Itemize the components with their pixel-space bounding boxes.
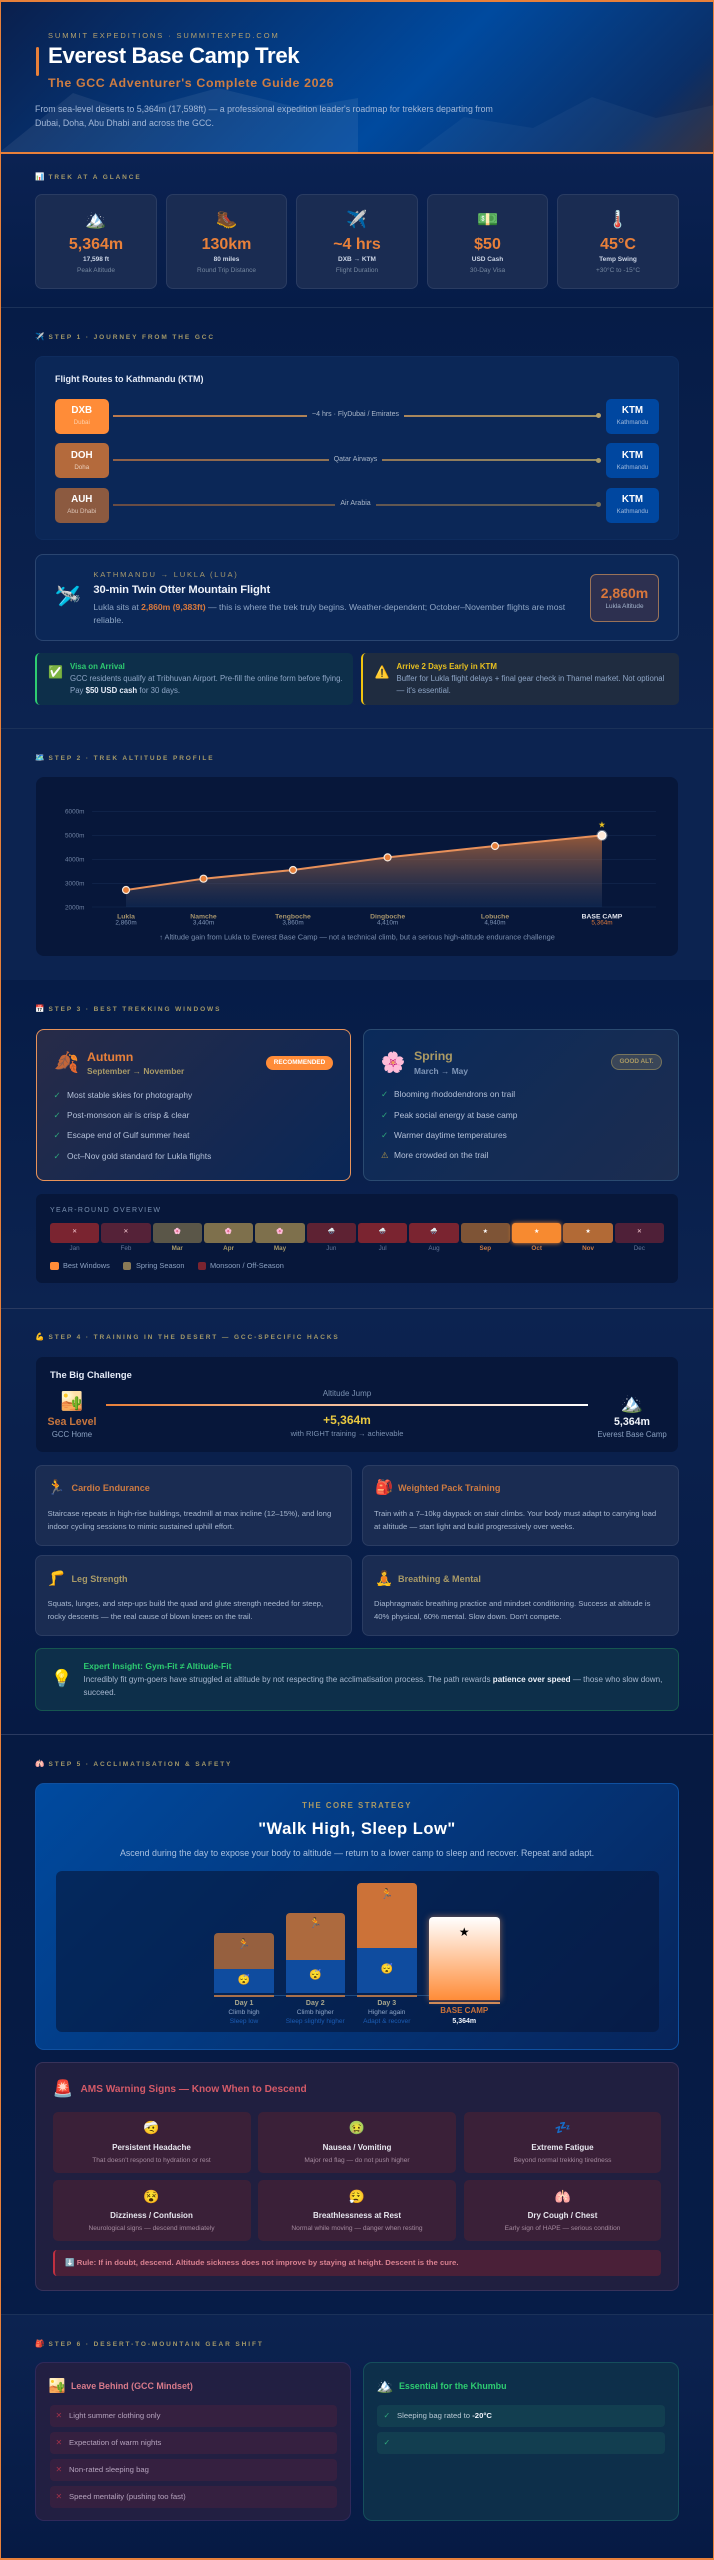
- card: breathing: Diaphragmatic breathing practice and mindset conditioning. Success at altitude is: [374, 1599, 650, 1608]
- month calendar: [50, 1219, 664, 1252]
- panel: core strategy: THE CORE STRATEGY: [302, 1801, 412, 1810]
- bar: day 1: 😴: [238, 1975, 250, 1986]
- bar: day 3: Higher again: [368, 2009, 405, 2016]
- legend: Best Windows: [63, 1261, 110, 1270]
- stat card: flight: Flight Duration: [336, 267, 378, 274]
- card: breathing: 🧘: [375, 1571, 393, 1587]
- callout: arrive early: ⚠️: [375, 665, 389, 679]
- panel: core strategy: [35, 1783, 679, 2050]
- panel: essentials: Essential for the Khumbu: [399, 2381, 506, 2391]
- panel: altitude chart: 3,440m: [193, 920, 214, 927]
- route: Doha: DOH: [71, 450, 93, 461]
- item: Speed mentality (pushing too fast): [69, 2492, 186, 2501]
- altitude jump bar: [106, 1404, 588, 1406]
- card: breathing: 40% physical, 60% mental. Slow down. Don't compete.: [374, 1612, 561, 1621]
- flight description: reliable.: [93, 615, 124, 625]
- month calendar: Feb: [120, 1245, 131, 1252]
- altitude badge: 2,860m: [601, 585, 648, 601]
- badge: GOOD ALT.: [619, 1058, 654, 1065]
- symptom: fatigue: [464, 2112, 661, 2173]
- panel: leave behind: [35, 2362, 351, 2521]
- month calendar: 🌧️: [328, 1229, 335, 1235]
- month calendar: ★: [483, 1229, 488, 1235]
- stat card: temperature: 45°C: [600, 236, 636, 253]
- route: Abu Dhabi: [55, 488, 659, 523]
- panel: big challenge: GCC Home: [52, 1430, 92, 1439]
- section heading: STEP 3 · BEST TREKKING WINDOWS: [48, 1006, 221, 1013]
- symptom: headache: Persistent Headache: [112, 2143, 191, 2152]
- kicker: KATHMANDU → LUKLA (LUA): [93, 570, 239, 579]
- panel: year-round overview: YEAR-ROUND OVERVIEW: [50, 1207, 161, 1214]
- card: breathing: Breathing & Mental: [398, 1574, 481, 1584]
- title: Everest Base Camp Trek: [48, 43, 299, 68]
- route: Dubai: Dubai: [74, 419, 90, 426]
- route: Dubai: [55, 399, 659, 434]
- panel: big challenge: Everest Base Camp: [597, 1430, 667, 1439]
- callout: arrive early: [361, 653, 679, 705]
- card: weighted pack: at altitude — start light and build progressively over weeks.: [374, 1522, 574, 1531]
- bar: day 2: Day 2: [306, 2000, 325, 2007]
- panel: core strategy: "Walk High, Sleep Low": [258, 1819, 456, 1838]
- symptom: dry cough: Dry Cough / Chest: [528, 2211, 597, 2220]
- badge: RECOMMENDED: [274, 1059, 325, 1066]
- section heading: STEP 1 · JOURNEY FROM THE GCC: [48, 334, 215, 340]
- callout: visa: ✅: [48, 665, 63, 679]
- bar: day 2: Sleep slightly higher: [286, 2018, 345, 2025]
- list: ✓: [54, 1090, 61, 1100]
- mountain silhouettes: [1, 88, 696, 152]
- list: More crowded on the trail: [394, 1150, 488, 1160]
- card: cardio: Cardio Endurance: [72, 1483, 150, 1493]
- item: [377, 2405, 665, 2427]
- symptom: nausea: Major red flag — do not push higher: [304, 2157, 410, 2164]
- panel: spring: [363, 1029, 679, 1181]
- month calendar: ✕: [123, 1229, 128, 1235]
- month calendar: Aug: [428, 1245, 440, 1252]
- panel: altitude chart: 5000m: [65, 833, 85, 840]
- list: [381, 1089, 518, 1160]
- list: Escape end of Gulf summer heat: [67, 1130, 189, 1140]
- month calendar: Dec: [634, 1245, 645, 1252]
- stat card: flight: ~4 hrs: [333, 236, 381, 253]
- stat card: altitude: 17,598 ft: [83, 256, 109, 263]
- stat card: altitude: 🏔️: [85, 210, 107, 229]
- card: weighted pack: 🎒: [375, 1480, 393, 1496]
- stat card: temperature: 🌡️: [607, 210, 629, 229]
- card: leg strength: 🦵: [47, 1571, 65, 1587]
- route: Doha: Kathmandu: [617, 464, 648, 471]
- eyebrow: SUMMIT EXPEDITIONS · SUMMITEXPED.COM: [48, 31, 280, 40]
- month calendar: May: [274, 1245, 286, 1252]
- panel: autumn: September → November: [87, 1066, 184, 1076]
- panel: altitude chart: 2000m: [65, 905, 85, 912]
- card: cardio: [35, 1465, 352, 1546]
- section: step 2 altitude: [0, 729, 714, 980]
- card: weighted pack: Train with a 7–10kg daypack on stair climbs. Your body must adapt to carrying load: [374, 1509, 656, 1518]
- list: Warmer daytime temperatures: [394, 1130, 507, 1140]
- panel: big challenge: 🏔️: [621, 1393, 643, 1413]
- list: ✓: [54, 1130, 61, 1140]
- panel: autumn: [36, 1029, 351, 1181]
- icon: small plane: 🛩️: [55, 585, 81, 608]
- panel: altitude chart: 2,860m: [115, 920, 137, 927]
- symptom: breathlessness: [258, 2180, 456, 2241]
- panel: big challenge: The Big Challenge: [50, 1369, 132, 1380]
- card: cardio: Staircase repeats in high-rise buildings, treadmill at max incline (12–15%), and long: [48, 1509, 331, 1518]
- panel title: Flight Routes to Kathmandu (KTM): [55, 374, 203, 384]
- bar: base camp: 5,364m: [452, 2018, 476, 2025]
- month calendar: Sep: [480, 1245, 491, 1252]
- symptom: dizziness: Neurological signs — descend immediately: [88, 2225, 215, 2232]
- section: step 3 windows: [0, 980, 714, 1309]
- panel: big challenge: +5,364m: [323, 1413, 371, 1427]
- panel: big challenge: [36, 1357, 678, 1452]
- accent bar: [36, 47, 39, 76]
- bar: day 1: Climb high: [228, 2009, 260, 2016]
- bar: day 2: Climb higher: [297, 2009, 334, 2016]
- bar: base camp: [424, 1912, 505, 2025]
- bar: day 3: Day 3: [377, 2000, 396, 2007]
- section heading: STEP 6 · DESERT-TO-MOUNTAIN GEAR SHIFT: [48, 2341, 264, 2348]
- symptom: headache: 🤕: [143, 2120, 160, 2135]
- flight title: 30-min Twin Otter Mountain Flight: [93, 584, 270, 596]
- card: cardio: indoor cycling sessions to mimic sustained uphill effort.: [48, 1522, 234, 1531]
- section heading: 💪: [35, 1332, 44, 1341]
- section: step 5 acclimatisation: [0, 1735, 714, 2315]
- section heading: [35, 1004, 221, 1013]
- panel: AMS warning signs: 🚨: [53, 2080, 73, 2098]
- month calendar: Nov: [582, 1245, 594, 1252]
- panel: altitude chart: 5,364m: [591, 920, 613, 927]
- month calendar: Jun: [326, 1245, 336, 1252]
- panel: big challenge: 🏜️: [61, 1391, 83, 1411]
- card: leg strength: Squats, lunges, and step-ups build the quad and glute strength needed for steep,: [48, 1599, 323, 1608]
- panel: essentials: [363, 2362, 679, 2521]
- route: Doha: [55, 443, 659, 478]
- month calendar: ★: [585, 1229, 591, 1235]
- legend: Spring Season: [136, 1261, 184, 1270]
- panel: altitude chart: [36, 777, 678, 956]
- stat card: visa: [427, 194, 548, 289]
- item: Expectation of warm nights: [69, 2438, 161, 2447]
- callout: expert insight: 💡: [51, 1669, 73, 1688]
- symptom: fatigue: Extreme Fatigue: [531, 2143, 594, 2152]
- route: Doha: Qatar Airways: [334, 456, 377, 463]
- callout: visa: [35, 653, 353, 705]
- panel: altitude chart: ★: [598, 820, 606, 830]
- subtitle: The GCC Adventurer's Complete Guide 2026: [48, 76, 334, 90]
- section: trek at a glance: [0, 154, 714, 308]
- list: [54, 1090, 211, 1161]
- stat card: flight: ✈️: [346, 210, 368, 229]
- item: ✕: [56, 2465, 62, 2474]
- route: Abu Dhabi: Abu Dhabi: [67, 508, 96, 515]
- bar: base camp: BASE CAMP: [440, 2006, 488, 2015]
- stat card: altitude: 5,364m: [69, 236, 123, 253]
- route: Abu Dhabi: Air Arabia: [340, 500, 371, 507]
- symptom: headache: [52, 2112, 250, 2173]
- panel: spring: March → May: [414, 1066, 468, 1076]
- card: leg strength: rocky descents — the real cause of blown knees on the trail.: [48, 1612, 253, 1621]
- stat card: temperature: Temp Swing: [599, 256, 637, 263]
- panel: altitude chart: Dingboche: [370, 914, 405, 921]
- panel: altitude chart: 3,860m: [282, 920, 304, 927]
- month calendar: 🌧️: [379, 1229, 386, 1235]
- route: Abu Dhabi: AUH: [71, 494, 92, 505]
- item: ✕: [56, 2492, 62, 2501]
- description: [35, 104, 493, 128]
- description: From sea-level deserts to 5,364m (17,598ft) — a professional expedition leader's roadmap for trekkers departing from: [35, 104, 493, 114]
- panel: core strategy: Ascend during the day to expose your body to altitude — return to a lower camp to sleep and recover. Repeat and adapt.: [120, 1848, 594, 1858]
- stat card: distance: Round Trip Distance: [197, 267, 256, 274]
- list: ✓: [381, 1110, 388, 1120]
- bar: day 1: Day 1: [235, 2000, 253, 2007]
- stat card: visa: 💵: [477, 210, 499, 229]
- month calendar: ✕: [72, 1229, 77, 1235]
- bar: day 2: 🏃: [309, 1918, 322, 1929]
- symptom: nausea: Nausea / Vomiting: [323, 2143, 391, 2152]
- stat card: temperature: [557, 194, 679, 289]
- bar: base camp: ★: [459, 1925, 470, 1939]
- callout: arrive early: Arrive 2 Days Early in KTM: [396, 662, 497, 671]
- month calendar: Oct: [531, 1245, 542, 1252]
- panel: big challenge: 5,364m: [614, 1416, 650, 1428]
- callout: expert insight: Expert Insight: Gym-Fit ≠ Altitude-Fit: [84, 1661, 231, 1671]
- month calendar: Apr: [223, 1245, 234, 1252]
- symptom: breathlessness: 😮‍💨: [349, 2189, 365, 2204]
- symptom: fatigue: 💤: [555, 2120, 571, 2135]
- panel: autumn: Autumn: [87, 1050, 133, 1064]
- rule callout: [52, 2250, 661, 2276]
- month calendar: Jul: [379, 1245, 387, 1252]
- bar: day 1: Sleep low: [230, 2018, 258, 2025]
- month calendar: 🌸: [276, 1229, 284, 1235]
- callout: arrive early: — it's essential.: [396, 686, 451, 695]
- hero header: [0, 0, 714, 154]
- stat card: visa: USD Cash: [472, 256, 503, 263]
- panel: altitude chart: Namche: [190, 914, 217, 921]
- callout: visa: GCC residents qualify at Tribhuvan Airport. Pre-fill the online form before flying.: [70, 674, 343, 683]
- section heading: 🫁: [35, 1759, 44, 1768]
- route: Doha: KTM: [622, 450, 643, 461]
- panel: leave behind: Leave Behind (GCC Mindset): [71, 2381, 193, 2391]
- symptom: dry cough: 🫁: [555, 2189, 571, 2204]
- panel: altitude chart: 4,410m: [377, 920, 398, 927]
- flight description: Lukla sits at 2,860m (9,383ft) — this is where the trek truly begins. Weather-dependent; October–November flights are most: [93, 602, 565, 612]
- month calendar: 🌧️: [430, 1229, 438, 1235]
- panel: flight routes: [35, 356, 679, 540]
- route: Dubai: Kathmandu: [617, 419, 648, 426]
- card: breathing: [362, 1555, 679, 1636]
- list: ✓: [54, 1110, 61, 1120]
- rule callout: ⬇️ Rule: If in doubt, descend. Altitude sickness does not improve by staying at height. Descent is the cure.: [65, 2258, 458, 2267]
- badge: [266, 1056, 333, 1070]
- section heading: STEP 5 · ACCLIMATISATION & SAFETY: [48, 1761, 232, 1768]
- bar: day 3: [357, 1883, 417, 2025]
- section heading: [35, 172, 142, 181]
- route: Abu Dhabi: Kathmandu: [617, 508, 648, 515]
- card: weighted pack: Weighted Pack Training: [398, 1483, 500, 1493]
- panel: altitude chart: Lukla: [117, 914, 135, 921]
- card: weighted pack: [362, 1465, 679, 1546]
- panel: AMS warning signs: AMS Warning Signs — Know When to Descend: [80, 2084, 307, 2095]
- item: [50, 2486, 337, 2508]
- panel: altitude chart: Lobuche: [481, 914, 509, 921]
- panel: Lukla flight: [35, 554, 679, 641]
- symptom: nausea: [258, 2112, 456, 2173]
- flight description: [93, 602, 566, 625]
- month calendar: ★: [534, 1229, 539, 1235]
- symptom: breathlessness: Normal while moving — danger when resting: [291, 2225, 423, 2232]
- panel: altitude chart: 4000m: [65, 857, 85, 864]
- bar: day 2: [286, 1913, 345, 2025]
- panel: AMS warning signs: [35, 2062, 679, 2291]
- list: Post-monsoon air is crisp & clear: [67, 1110, 189, 1120]
- callout: expert insight: Incredibly fit gym-goers have struggled at altitude by not respecting the acclimatisation process. The path rewards patience over speed — those who slow down,: [84, 1675, 662, 1684]
- panel: altitude chart: 4,940m: [484, 920, 506, 927]
- panel: altitude chart: 6000m: [65, 809, 85, 816]
- stat card: visa: $50: [474, 236, 501, 253]
- stat card: distance: [166, 194, 287, 289]
- item: [50, 2405, 337, 2427]
- badge: [611, 1054, 662, 1070]
- month calendar: 🌸: [174, 1229, 181, 1235]
- item: [50, 2432, 337, 2454]
- route: Abu Dhabi: KTM: [622, 494, 643, 505]
- panel: altitude chart: Tengboche: [275, 914, 311, 921]
- panel: altitude chart: BASE CAMP: [582, 914, 623, 921]
- panel: spring: 🌸: [381, 1052, 405, 1074]
- panel: big challenge: with RIGHT training → achievable: [291, 1429, 403, 1438]
- panel: big challenge: Sea Level: [48, 1416, 96, 1428]
- symptom: dry cough: [464, 2180, 661, 2241]
- section: step 1 journey: [0, 308, 714, 729]
- item: Non-rated sleeping bag: [69, 2465, 149, 2474]
- stat card: altitude: Peak Altitude: [77, 267, 115, 274]
- section heading: TREK AT A GLANCE: [48, 174, 142, 181]
- bar: day 3: 🏃: [381, 1889, 393, 1900]
- callout: arrive early: Buffer for Lukla flight delays + final gear check in Thamel market. Not optional: [396, 674, 664, 683]
- item: ✓: [384, 2411, 390, 2420]
- stat card: distance: 🥾: [216, 210, 238, 229]
- stat card: temperature: +30°C to -15°C: [596, 267, 640, 274]
- list: Blooming rhododendrons on trail: [394, 1089, 515, 1099]
- panel: autumn: 🍂: [54, 1052, 79, 1074]
- panel: essentials: 🏔️: [377, 2378, 393, 2393]
- section heading: 📅: [35, 1004, 44, 1013]
- route: Doha: Doha: [74, 464, 89, 471]
- item: Light summer clothing only: [69, 2411, 160, 2420]
- legend: [50, 1261, 284, 1270]
- card: leg strength: Leg Strength: [72, 1574, 128, 1584]
- bar: day 2: 😴: [309, 1970, 322, 1981]
- card: cardio: 🏃: [47, 1480, 65, 1496]
- symptom: dizziness: [52, 2180, 250, 2241]
- altitude badge: Lukla Altitude: [605, 603, 644, 610]
- callout: visa: Pay $50 USD cash for 30 days.: [70, 686, 180, 695]
- stat card: altitude: [35, 194, 157, 289]
- section: step 6 gear: [0, 2315, 714, 2560]
- route: Dubai: DXB: [71, 405, 92, 416]
- bar: day 1: [214, 1933, 274, 2025]
- section heading: 🗺️: [35, 753, 44, 762]
- month calendar: Mar: [172, 1245, 183, 1252]
- item: ✓: [384, 2438, 390, 2447]
- stat card: distance: 130km: [202, 236, 251, 253]
- section heading: STEP 2 · TREK ALTITUDE PROFILE: [48, 755, 214, 762]
- item: ✕: [56, 2438, 62, 2447]
- bar: day 1: 🏃: [238, 1939, 250, 1950]
- callout: expert insight: [35, 1648, 679, 1711]
- item: [50, 2459, 337, 2481]
- bar: day 3: 😴: [381, 1964, 393, 1975]
- list: Most stable skies for photography: [67, 1090, 192, 1100]
- symptom: dry cough: Early sign of HAPE — serious condition: [505, 2225, 620, 2232]
- item: ✕: [56, 2411, 62, 2420]
- panel: year-round overview: [36, 1194, 678, 1283]
- month calendar: ✕: [637, 1229, 642, 1235]
- symptom: nausea: 🤢: [349, 2120, 365, 2135]
- section heading: 🎒: [35, 2339, 44, 2348]
- list: ✓: [381, 1089, 388, 1099]
- callout: visa: Visa on Arrival: [70, 662, 125, 671]
- panel: spring: Spring: [414, 1049, 453, 1063]
- panel: altitude chart: 3000m: [65, 881, 85, 888]
- stat card: flight: [296, 194, 418, 289]
- symptom: dizziness: 😵: [143, 2189, 160, 2204]
- panel: leave behind: 🏜️: [49, 2378, 65, 2393]
- list: Peak social energy at base camp: [394, 1110, 517, 1120]
- route: Dubai: KTM: [622, 405, 643, 416]
- stat card: visa: 30-Day Visa: [470, 267, 505, 274]
- item: [377, 2432, 665, 2454]
- section heading: STEP 4 · TRAINING IN THE DESERT — GCC-SPECIFIC HACKS: [48, 1334, 340, 1341]
- symptom: headache: That doesn't respond to hydration or rest: [92, 2157, 211, 2164]
- month calendar: 🌸: [225, 1229, 232, 1235]
- chart: walk high sleep low: [56, 1871, 659, 2032]
- bar: day 3: Adapt & recover: [363, 2018, 410, 2025]
- panel: big challenge: Altitude Jump: [323, 1389, 371, 1398]
- list: ✓: [54, 1151, 61, 1161]
- list: ⚠︎: [381, 1150, 389, 1160]
- list: Oct–Nov gold standard for Lukla flights: [67, 1151, 211, 1161]
- symptom: breathlessness: Breathlessness at Rest: [313, 2211, 401, 2220]
- altitude badge: [590, 574, 659, 622]
- symptom: dizziness: Dizziness / Confusion: [110, 2211, 193, 2220]
- panel: altitude chart: ↑ Altitude gain from Lukla to Everest Base Camp — not a technical climb, but a serious high-altitude endurance challenge: [159, 933, 555, 942]
- list: ✓: [381, 1130, 388, 1140]
- route: Dubai: ~4 hrs · FlyDubai / Emirates: [312, 411, 399, 418]
- symptom: fatigue: Beyond normal trekking tiredness: [514, 2157, 611, 2164]
- section heading: ✈️: [35, 332, 44, 340]
- item: Sleeping bag rated to -20°C: [397, 2411, 492, 2420]
- section: step 4 training: [0, 1309, 714, 1735]
- callout: expert insight: succeed.: [84, 1688, 116, 1696]
- section heading: 📊: [35, 172, 44, 181]
- stat card: flight: DXB → KTM: [338, 256, 376, 263]
- description: Dubai, Doha, Abu Dhabi and across the GCC.: [35, 118, 214, 128]
- legend: Monsoon / Off-Season: [210, 1261, 284, 1270]
- stat card: distance: 80 miles: [214, 256, 239, 263]
- month calendar: Jan: [70, 1245, 80, 1252]
- card: leg strength: [35, 1555, 352, 1636]
